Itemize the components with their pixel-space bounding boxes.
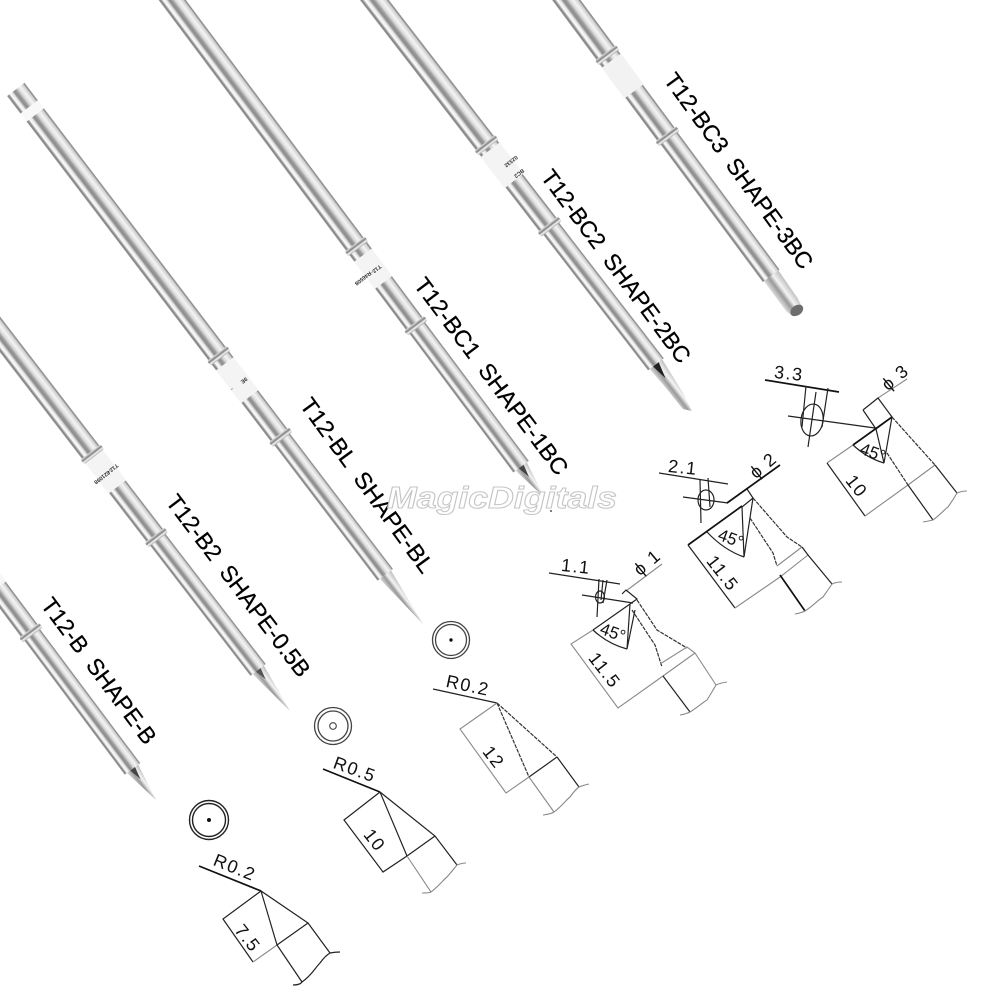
icon: B tip end view bbox=[190, 800, 228, 840]
soldering tip: T12-BC2 bbox=[358, 0, 702, 419]
label: T12-B2 SHAPE-0.5B: T12-B2 SHAPE-0.5B bbox=[161, 489, 316, 682]
drawing: T12-B dimensions bbox=[199, 850, 340, 985]
drawing: T12-BC2 dimensions: ϕ 2 bbox=[746, 448, 781, 483]
drawing: T12-BC1 dimensions: 1.1 bbox=[560, 555, 592, 578]
label: T12-BC2 SHAPE-2BC: T12-BC2 SHAPE-2BC bbox=[536, 164, 696, 368]
drawing: T12-BL dimensions: R0.2 bbox=[444, 671, 492, 700]
band marking: T12-B2 bbox=[93, 462, 119, 485]
drawing: T12-BC3 dimensions: 3.3 bbox=[773, 362, 805, 385]
drawing: T12-BC1 dimensions bbox=[549, 545, 727, 715]
band marking: T12-BC2: BC2 bbox=[512, 167, 525, 179]
band marking: T12-BC2 bbox=[503, 154, 525, 179]
band marking: T12-BC1: R46508 bbox=[353, 269, 372, 286]
watermark: MagicDigitals bbox=[387, 480, 617, 515]
soldering tip: T12-BL bbox=[6, 82, 433, 632]
drawing: T12-BC2 dimensions: 45° bbox=[715, 525, 746, 552]
soldering tip: T12-BC3 bbox=[529, 0, 810, 322]
drawing: T12-BC1 dimensions: ϕ 1 bbox=[630, 545, 665, 580]
band marking: T12-BL: 9E bbox=[239, 375, 248, 384]
icon: BL tip end view bbox=[432, 622, 470, 658]
drawing: T12-B2 dimensions: 10 bbox=[360, 825, 390, 856]
label: T12-BC1 SHAPE-1BC: T12-BC1 SHAPE-1BC bbox=[409, 272, 574, 480]
soldering tip: T12-B bbox=[0, 552, 166, 807]
drawing: T12-BC3 dimensions: 45° bbox=[857, 439, 888, 466]
drawing: T12-BC3 dimensions bbox=[765, 360, 967, 522]
drawing: T12-BC3 dimensions: ϕ 3 bbox=[878, 360, 913, 395]
drawing: T12-B dimensions: R0.2 bbox=[211, 850, 259, 885]
band marking: T12-B2: 821098 bbox=[93, 469, 111, 485]
dot near tip bbox=[550, 510, 552, 512]
band marking: T12-BC1: T12- bbox=[369, 263, 382, 275]
drawing: T12-BL dimensions: 12 bbox=[479, 742, 509, 773]
drawing: T12-BC1 dimensions: 45° bbox=[597, 619, 628, 646]
band marking: T12-BC2: 02332 bbox=[503, 154, 518, 168]
label: T12-BL SHAPE-BL: T12-BL SHAPE-BL bbox=[295, 393, 440, 578]
drawing: T12-B2 dimensions bbox=[323, 753, 466, 893]
drawing: T12-B2 dimensions: R0.5 bbox=[331, 753, 379, 786]
drawing: T12-BC2 dimensions bbox=[659, 448, 842, 614]
drawing: T12-BC2 dimensions: 11.5 bbox=[703, 551, 743, 595]
drawing: T12-BC1 dimensions: 11.5 bbox=[585, 648, 625, 692]
drawing: T12-BC3 dimensions: 10 bbox=[842, 471, 872, 502]
band marking: T12-BL bbox=[229, 375, 248, 392]
label: T12-BC3 SHAPE-3BC: T12-BC3 SHAPE-3BC bbox=[659, 68, 819, 274]
icon: 0.5B tip end view bbox=[314, 708, 352, 744]
label: T12-B SHAPE-B: T12-B SHAPE-B bbox=[36, 592, 162, 749]
drawing: T12-BC2 dimensions: 2.1 bbox=[667, 456, 699, 479]
drawing: T12-B dimensions: 7.5 bbox=[231, 921, 265, 956]
drawing: T12-BL dimensions bbox=[433, 671, 589, 815]
band marking: T12-B2: T12- bbox=[106, 462, 119, 474]
band marking: T12-BC1 bbox=[353, 263, 382, 286]
soldering tip: T12-BC1 bbox=[137, 0, 551, 500]
soldering tip: T12-B2 bbox=[0, 291, 300, 719]
band marking: T12-BL: - bbox=[229, 386, 234, 392]
